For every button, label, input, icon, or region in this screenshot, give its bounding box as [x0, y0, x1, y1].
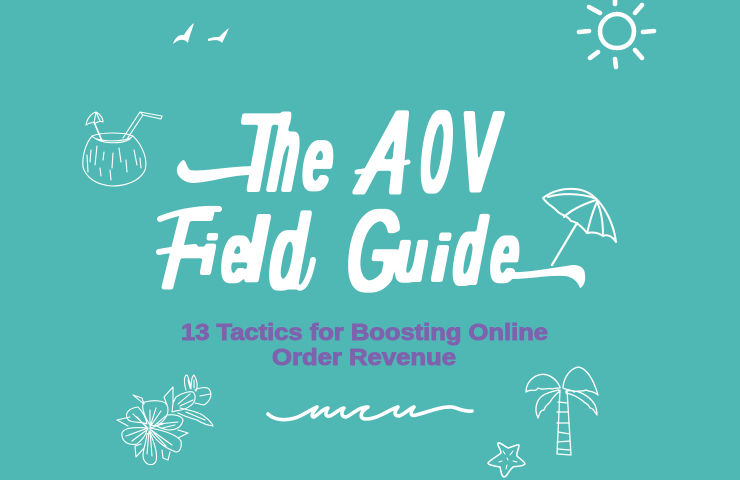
title line two: G — [343, 186, 403, 315]
icon: palm tree — [526, 367, 598, 455]
title — [159, 86, 585, 315]
title line two: i — [202, 226, 216, 286]
icon: coconut drink — [83, 112, 162, 186]
title line one: V — [460, 87, 503, 215]
icon: sun — [579, 0, 654, 67]
icon: hibiscus flower — [117, 375, 213, 465]
title line one: A — [350, 86, 424, 219]
title line two: e — [489, 208, 522, 300]
title line one: e — [301, 111, 336, 209]
icon: wave divider — [268, 407, 472, 420]
title swashes: F bars — [159, 209, 219, 252]
icon: seagulls — [173, 23, 229, 44]
subtitle: Order Revenue — [272, 344, 456, 370]
icon: beach umbrella — [543, 189, 616, 265]
title line one: T — [233, 92, 290, 215]
title swash: Guide — [510, 265, 585, 288]
title line two: d — [267, 194, 311, 311]
title line two: i — [433, 222, 449, 294]
subtitle: 13 Tactics for Boosting Online — [181, 319, 548, 345]
subtitle — [181, 319, 548, 370]
title swash: Field d tail — [298, 260, 313, 288]
title line two — [159, 186, 522, 315]
title line one — [233, 86, 503, 219]
title line two: u — [395, 213, 428, 297]
icon: starfish — [488, 443, 525, 477]
title swash: A crossbar — [357, 162, 408, 172]
title line two: e — [220, 208, 253, 300]
title line two: d — [451, 198, 489, 304]
title line one: h — [266, 95, 304, 214]
title line one: O — [418, 88, 455, 215]
title line two: l — [246, 201, 269, 301]
title line two: F — [159, 186, 215, 312]
title swash: The — [177, 160, 262, 183]
